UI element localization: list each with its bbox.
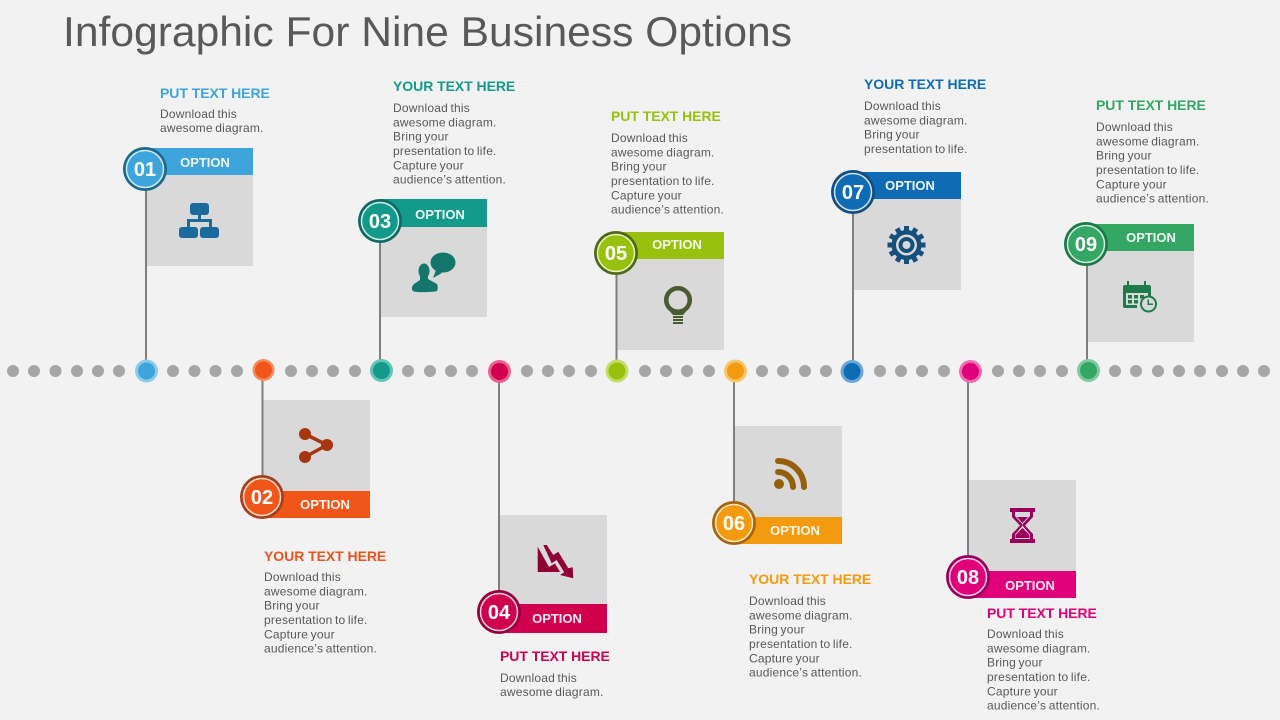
panel: option 04: 04 <box>488 602 511 624</box>
heading and text: option 02: Bring your <box>264 599 320 613</box>
heading and text: option 07: Bring your <box>864 128 920 142</box>
heading and text: option 03: presentation to life. <box>393 144 497 158</box>
panel: option 05: OPTION <box>652 237 702 252</box>
heading and text: option 03: YOUR TEXT HERE <box>393 78 515 94</box>
heading and text: option 06: presentation to life. <box>749 637 853 651</box>
icon: share <box>299 428 333 463</box>
heading and text: option 08: Capture your <box>987 684 1058 698</box>
heading and text: option 06: audience’s attention. <box>749 666 862 680</box>
panel: option 03 <box>358 78 515 382</box>
heading and text: option 05: Capture your <box>611 188 682 202</box>
heading and text: option 09: PUT TEXT HERE <box>1096 97 1206 113</box>
heading and text: option 09: audience’s attention. <box>1096 192 1209 206</box>
heading and text: option 03: Bring your <box>393 130 449 144</box>
panel: option 09: 09 <box>1075 234 1097 256</box>
panel: option 08: OPTION <box>1005 578 1055 593</box>
heading and text: option 07: Download this <box>864 99 941 113</box>
panel: option 03: 03 <box>369 211 391 233</box>
icon: hourglass <box>1010 508 1035 543</box>
icon: org chart <box>179 203 219 238</box>
timeline dots <box>7 365 1270 377</box>
panel: option 01: 01 <box>134 159 156 181</box>
panel: option 08 <box>946 360 1100 713</box>
heading and text: option 06: Bring your <box>749 623 805 637</box>
heading and text: option 08: presentation to life. <box>987 670 1091 684</box>
icon: person with speech bubble <box>412 252 456 292</box>
title: Infographic For Nine Business Options <box>63 8 792 55</box>
panel: option 03: OPTION <box>415 207 465 222</box>
panel: option 09 <box>1064 97 1209 382</box>
heading and text: option 04: awesome diagram. <box>500 685 604 699</box>
heading and text: option 09: presentation to life. <box>1096 163 1200 177</box>
panel: option 07: OPTION <box>885 178 935 193</box>
heading and text: option 04: Download this <box>500 671 577 685</box>
panel: option 02: 02 <box>251 487 273 509</box>
heading and text: option 09: Bring your <box>1096 149 1152 163</box>
panel: option 01: OPTION <box>180 155 230 170</box>
heading and text: option 01: Download this <box>160 107 237 121</box>
icon: falling arrow <box>538 545 573 578</box>
panel: option 06: 06 <box>723 513 745 535</box>
heading and text: option 03: audience’s attention. <box>393 173 506 187</box>
heading and text: option 08: PUT TEXT HERE <box>987 605 1097 621</box>
heading and text: option 03: awesome diagram. <box>393 115 497 129</box>
panel: option 04: OPTION <box>532 611 582 626</box>
panel: option 02: OPTION <box>300 497 350 512</box>
heading and text: option 08: Bring your <box>987 656 1043 670</box>
heading and text: option 05: Bring your <box>611 160 667 174</box>
heading and text: option 04: PUT TEXT HERE <box>500 648 610 664</box>
heading and text: option 07: awesome diagram. <box>864 113 968 127</box>
heading and text: option 03: Download this <box>393 101 470 115</box>
heading and text: option 07: YOUR TEXT HERE <box>864 76 986 92</box>
heading and text: option 02: Capture your <box>264 627 335 641</box>
panel: option 08: 08 <box>957 567 979 589</box>
heading and text: option 08: audience’s attention. <box>987 699 1100 713</box>
panel: option 09: OPTION <box>1126 230 1176 245</box>
heading and text: option 01: awesome diagram. <box>160 121 264 135</box>
heading and text: option 09: Capture your <box>1096 177 1167 191</box>
heading and text: option 05: audience’s attention. <box>611 203 724 217</box>
panel: option 07: 07 <box>842 182 864 204</box>
heading and text: option 06: YOUR TEXT HERE <box>749 571 871 587</box>
heading and text: option 06: Capture your <box>749 651 820 665</box>
heading and text: option 07: presentation to life. <box>864 142 968 156</box>
panel: option 05 <box>594 108 724 382</box>
heading and text: option 03: Capture your <box>393 158 464 172</box>
panel: option 01 <box>123 85 270 382</box>
panel: option 05: 05 <box>605 243 627 265</box>
panel: option 02 <box>240 359 386 656</box>
heading and text: option 02: Download this <box>264 570 341 584</box>
heading and text: option 01: PUT TEXT HERE <box>160 85 270 101</box>
heading and text: option 05: PUT TEXT HERE <box>611 108 721 124</box>
heading and text: option 05: Download this <box>611 131 688 145</box>
heading and text: option 02: awesome diagram. <box>264 584 368 598</box>
heading and text: option 05: awesome diagram. <box>611 145 715 159</box>
heading and text: option 02: audience’s attention. <box>264 642 377 656</box>
heading and text: option 06: Download this <box>749 594 826 608</box>
heading and text: option 08: Download this <box>987 627 1064 641</box>
heading and text: option 09: Download this <box>1096 120 1173 134</box>
panel: option 06 <box>712 360 871 680</box>
heading and text: option 06: awesome diagram. <box>749 608 853 622</box>
panel: option 06: OPTION <box>770 523 820 538</box>
icon: RSS feed <box>774 461 804 489</box>
heading and text: option 09: awesome diagram. <box>1096 134 1200 148</box>
heading and text: option 02: YOUR TEXT HERE <box>264 548 386 564</box>
heading and text: option 02: presentation to life. <box>264 613 368 627</box>
heading and text: option 05: presentation to life. <box>611 174 715 188</box>
icon: calendar with clock <box>1123 281 1156 312</box>
icon: light bulb <box>664 286 692 324</box>
icon: gear <box>888 226 926 264</box>
panel: option 04 <box>477 360 610 699</box>
heading and text: option 08: awesome diagram. <box>987 641 1091 655</box>
panel: option 07 <box>831 76 986 383</box>
